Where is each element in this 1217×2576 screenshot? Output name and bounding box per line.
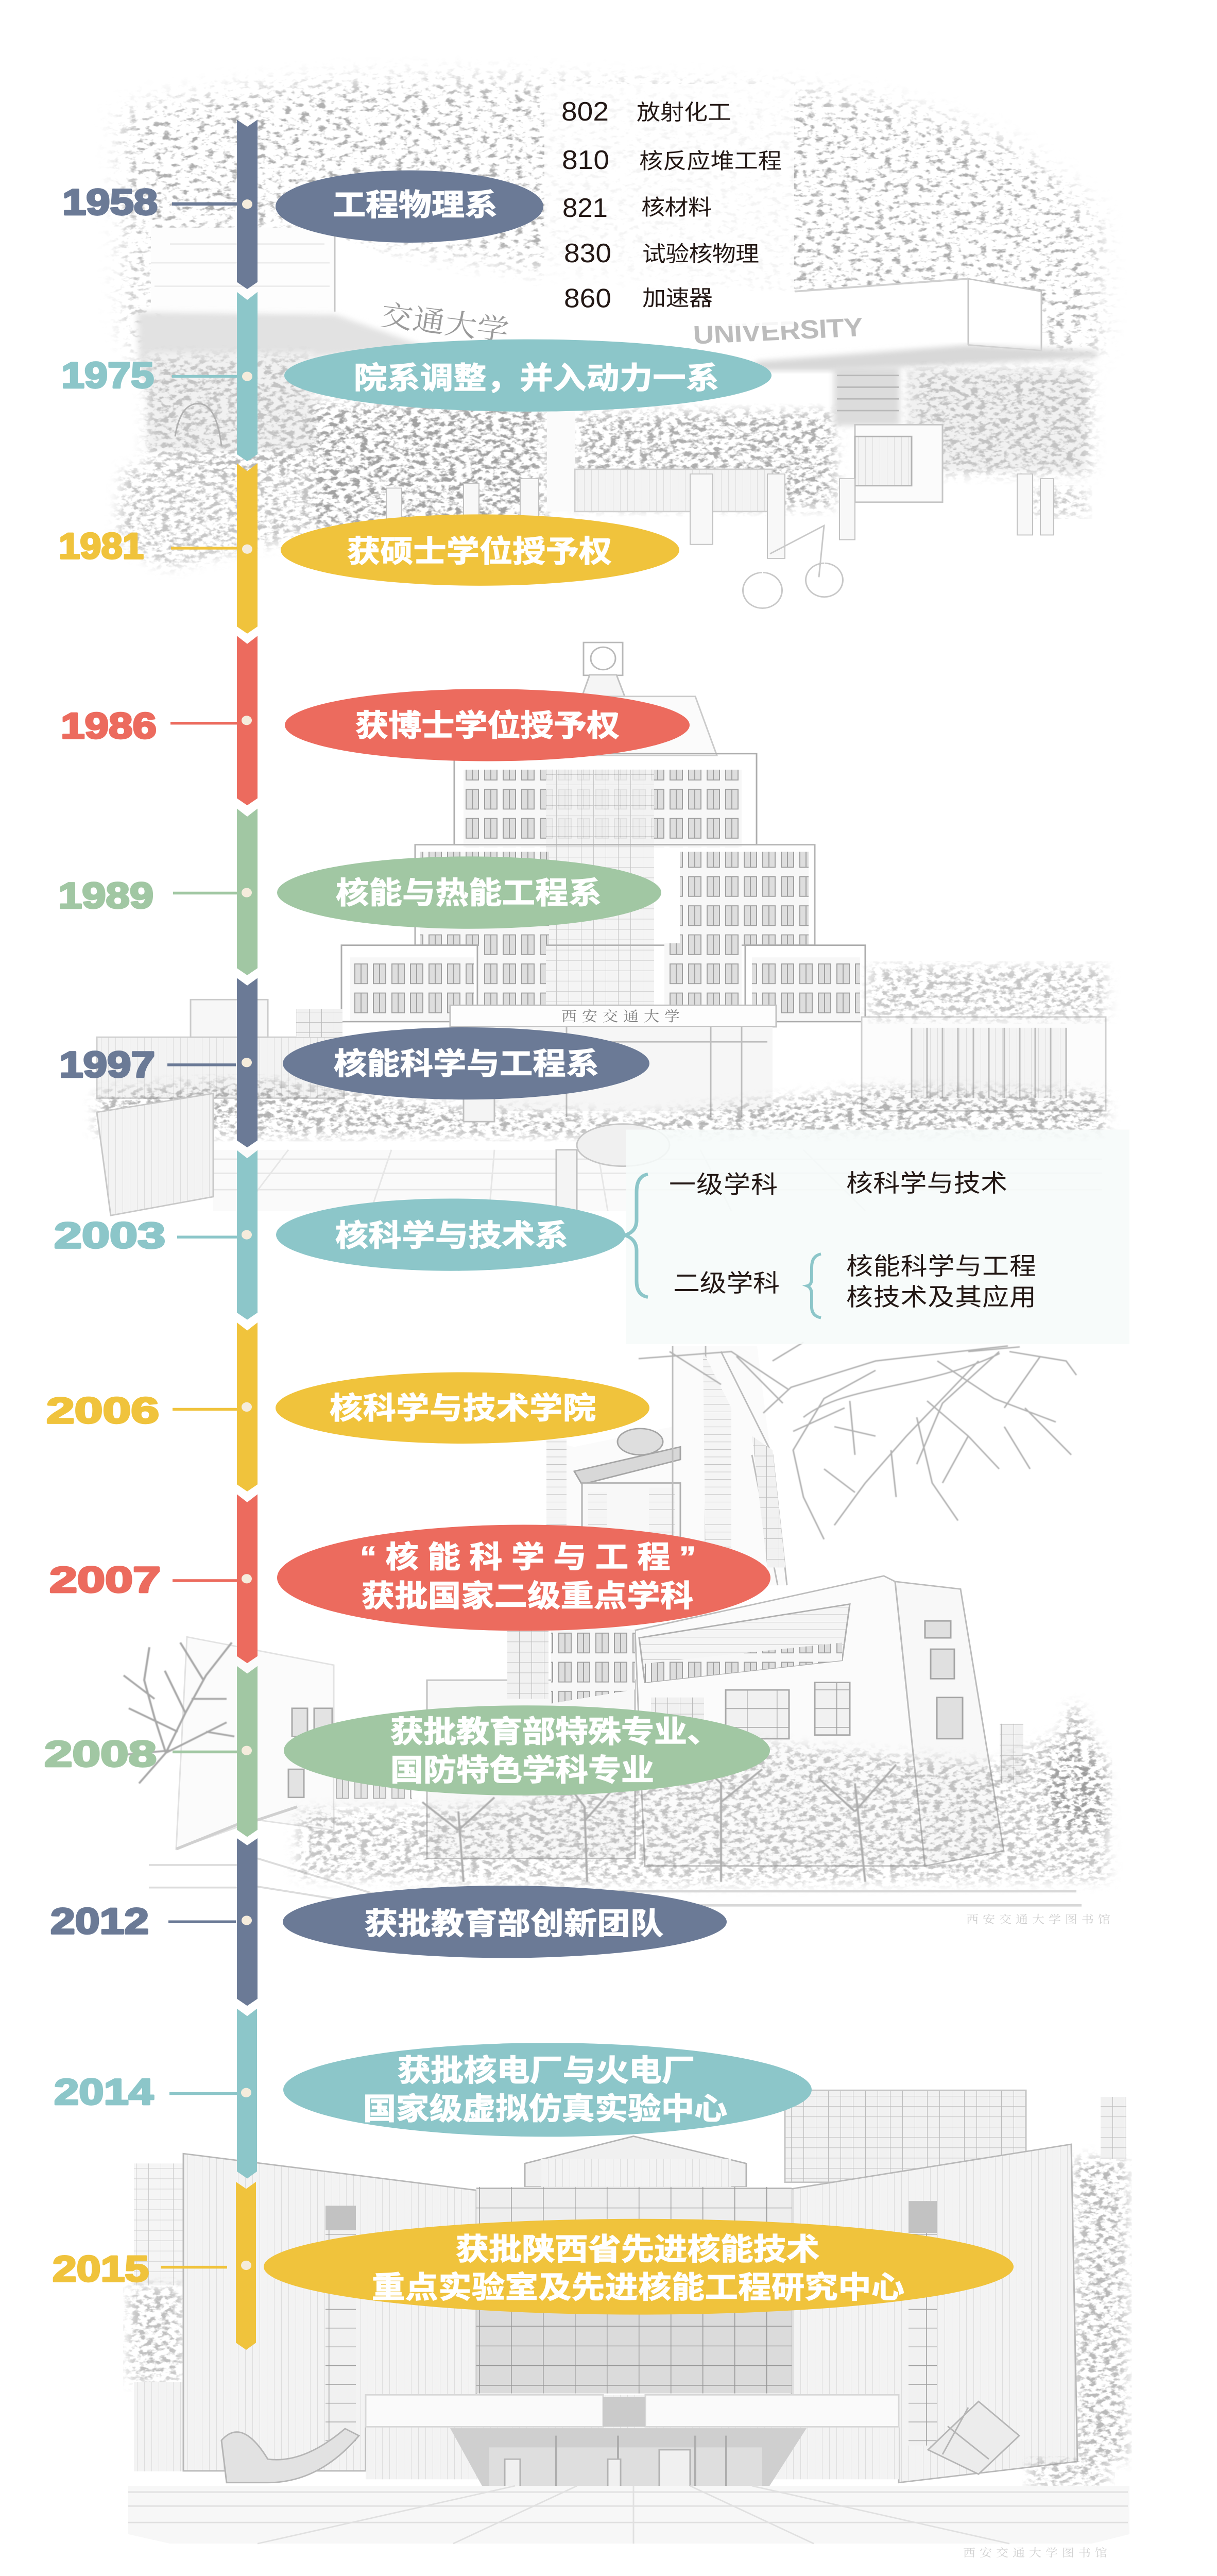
node: [241, 2261, 251, 2270]
panel: 2003 discipline breakdown: [625, 1130, 1129, 1344]
event: [276, 1372, 649, 1444]
year: 1981: [59, 526, 144, 566]
event: 获批核电厂与火电厂: [398, 2054, 695, 2087]
segment: [237, 1838, 258, 2006]
node: [242, 545, 252, 554]
connector: [173, 1579, 237, 1582]
node: [241, 2088, 251, 2097]
timeline 1958: [62, 120, 543, 289]
node: [242, 1402, 252, 1412]
node: [242, 1746, 252, 1755]
event: [277, 856, 661, 929]
event: 获博士学位授予权: [355, 709, 620, 742]
event: 核能科学与工程系: [334, 1047, 599, 1080]
year: 2003: [54, 1215, 165, 1256]
event: [285, 689, 690, 761]
event: [277, 1525, 770, 1631]
code 830: 试验核物理: [642, 242, 759, 266]
segment: [237, 2009, 257, 2178]
node: [242, 371, 252, 381]
gate english lettering: UNIVERSITY: [692, 313, 864, 350]
connector: [171, 547, 237, 550]
year: 2006: [46, 1390, 159, 1431]
timeline 2008: [44, 1666, 770, 1837]
large brace: [625, 1174, 648, 1297]
timeline 2014: [54, 2009, 812, 2178]
node: [242, 1230, 252, 1240]
year: 2014: [54, 2072, 153, 2112]
background sketch: tower building with bare trees: [118, 1342, 1115, 1926]
event: “核能科学与工程”: [360, 1540, 696, 1574]
connector: [173, 892, 237, 894]
node: [242, 1916, 252, 1925]
connector: [167, 1063, 236, 1066]
timeline 1981: [59, 463, 679, 634]
event: 国防特色学科专业: [390, 1754, 654, 1787]
event: 工程物理系: [333, 189, 498, 222]
event: 获批教育部创新团队: [365, 1907, 663, 1940]
segment: [237, 978, 258, 1147]
panel: 1958 specialty codes: [544, 84, 794, 326]
small brace: [807, 1254, 821, 1318]
code 821: 821: [562, 193, 608, 223]
connector: [170, 722, 237, 724]
code 810: 810: [562, 145, 609, 175]
connector: [168, 1920, 236, 1923]
timeline 2015: [53, 2182, 1014, 2350]
event: 核科学与技术学院: [330, 1392, 596, 1425]
connector: [177, 1235, 237, 1239]
second level disciplines: [846, 1252, 1036, 1311]
artist signature: 西安交通大学图书馆: [963, 2547, 1111, 2559]
year: 2007: [49, 1560, 161, 1600]
code 860: 加速器: [642, 286, 713, 311]
event: 重点实验室及先进核能工程研究中心: [372, 2270, 904, 2304]
timeline 2006: [46, 1323, 649, 1492]
event: [283, 1886, 727, 1958]
event: [276, 1198, 625, 1271]
connector: [161, 2266, 227, 2268]
background sketch: library facade: [128, 2090, 1129, 2559]
year: 1986: [61, 705, 157, 746]
code 802: 802: [561, 96, 609, 127]
year: 1989: [58, 875, 153, 916]
event: [284, 340, 772, 412]
event: 院系调整，并入动力一系: [354, 362, 719, 395]
event: [281, 514, 679, 586]
node: [242, 199, 252, 209]
event: [276, 171, 543, 243]
background sketch: main building with clock tower: 西安交通大学: [561, 1009, 685, 1025]
timeline 1997: [59, 978, 649, 1147]
event: [284, 1705, 770, 1795]
connector: [172, 375, 237, 378]
code 810: 核反应堆工程: [639, 149, 782, 174]
timeline 2007: [49, 1494, 770, 1663]
connector: [169, 2092, 237, 2095]
segment: [237, 463, 258, 634]
code 802: [561, 96, 731, 127]
second level disciplines: 核技术及其应用: [846, 1283, 1036, 1311]
timeline 1986: [61, 636, 690, 805]
code 810: [562, 145, 782, 175]
code 830: 830: [564, 239, 611, 268]
code 821: 核材料: [641, 196, 712, 220]
year: 1958: [62, 181, 158, 223]
code 802: 放射化工: [637, 100, 731, 125]
segment: [237, 809, 258, 975]
code 860: 860: [564, 283, 611, 313]
event: 核科学与技术系: [335, 1219, 568, 1252]
year: 2015: [53, 2248, 149, 2289]
code 821: [562, 193, 712, 223]
second level disciplines: 核能科学与工程: [846, 1252, 1036, 1280]
code 860: [564, 283, 713, 313]
node: [242, 1574, 252, 1583]
artist signature: 西安交通大学图书馆: [966, 1913, 1115, 1926]
segment: [236, 2182, 256, 2350]
segment: [237, 1150, 258, 1319]
event: [283, 2043, 812, 2137]
event: 国家级虚拟仿真实验中心: [363, 2092, 727, 2126]
timeline 2003: [54, 1150, 625, 1319]
year: 1975: [61, 355, 154, 396]
segment: [237, 292, 258, 461]
event: 获批陕西省先进核能技术: [456, 2233, 819, 2266]
timeline 1989: [58, 809, 661, 975]
node: [242, 1058, 252, 1067]
connector: [172, 202, 237, 206]
event: 获硕士学位授予权: [347, 535, 612, 568]
background sketch: university gate: [118, 81, 1097, 608]
first level discipline: [669, 1170, 1007, 1198]
year: 2008: [44, 1734, 157, 1774]
first level discipline: 一级学科: [669, 1171, 778, 1198]
timeline 2012: [50, 1838, 727, 2006]
code 830: [564, 239, 759, 268]
segment: [237, 636, 258, 805]
timeline 1975: [61, 292, 772, 461]
connector: [173, 1408, 237, 1411]
connector: [173, 1751, 237, 1753]
event: [264, 2219, 1014, 2315]
year: 1997: [59, 1044, 155, 1085]
gate inscription: 交通大学: [379, 299, 511, 347]
segment: [237, 1494, 258, 1663]
segment: [237, 120, 258, 289]
second level label: 二级学科: [673, 1269, 780, 1297]
segment: [237, 1323, 258, 1492]
segment: [237, 1666, 258, 1837]
event: 获批教育部特殊专业、: [390, 1715, 720, 1749]
node: [242, 716, 252, 725]
node: [242, 888, 252, 897]
year: 2012: [50, 1901, 149, 1941]
event: [283, 1027, 649, 1099]
event: 核能与热能工程系: [336, 876, 602, 910]
background sketch: main building with clock tower: [97, 642, 1106, 1218]
first level discipline: 核科学与技术: [846, 1170, 1007, 1197]
event: 获批国家二级重点学科: [362, 1580, 693, 1613]
